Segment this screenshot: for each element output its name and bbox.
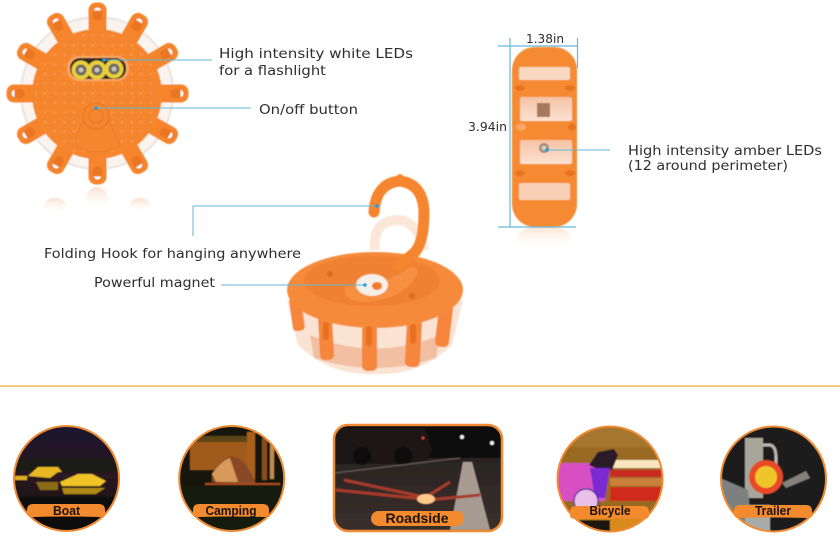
callout: magnet: [94, 275, 367, 291]
callout: folding hook: Folding Hook for hanging anywhere: [44, 246, 301, 262]
label: boat: Boat: [53, 504, 81, 518]
callout: on/off button: On/off button: [259, 102, 358, 118]
button housing: [73, 103, 120, 152]
side body: [512, 47, 577, 227]
use case: camping: [178, 425, 286, 532]
callout: amber LEDs: [545, 143, 822, 174]
callout: on/off button: [94, 102, 358, 118]
front tabs: [289, 296, 454, 371]
use case: trailer: [718, 425, 830, 535]
divider line: [0, 386, 840, 387]
dimensions: width and height: 1.38in: [526, 32, 564, 46]
callout: magnet: Powerful magnet: [94, 275, 215, 291]
callout: white LEDs: [102, 46, 413, 79]
label: roadside: Roadside: [386, 510, 449, 526]
folding hook: [374, 174, 424, 266]
label: camping: Camping: [206, 504, 256, 518]
translucent outer ring: [21, 17, 173, 169]
perimeter tabs: [6, 2, 189, 184]
dimensions: width and height: [468, 32, 578, 227]
magnet: [356, 274, 388, 296]
callout: white LEDs: for a flashlight: [219, 63, 326, 79]
callout: amber LEDs: High intensity amber LEDs: [628, 143, 822, 159]
callout: folding hook: [44, 204, 379, 262]
white LEDs: [67, 56, 129, 81]
use case: roadside: [333, 424, 503, 533]
product: flare with hook: [287, 174, 463, 374]
callout: white LEDs: High intensity white LEDs: [219, 46, 413, 62]
dimensions: width and height: 3.94in: [468, 120, 507, 134]
use case: bicycle: [555, 425, 667, 535]
callout: amber LEDs: (12 around perimeter): [628, 158, 788, 174]
flare reflection: [44, 187, 151, 214]
front band slots: [323, 322, 416, 346]
ghost hook: [375, 220, 424, 250]
label: bicycle: Bicycle: [590, 504, 631, 518]
clear body: [287, 300, 463, 374]
product: top view flare: [6, 2, 189, 214]
use case: boat: [13, 425, 120, 532]
label: trailer: Trailer: [755, 504, 791, 518]
top rim: [287, 252, 463, 328]
orange disc with dots: [32, 29, 162, 159]
side reflection: [517, 226, 571, 250]
product: side view flare: [512, 47, 577, 250]
label: roadside: [371, 510, 464, 526]
